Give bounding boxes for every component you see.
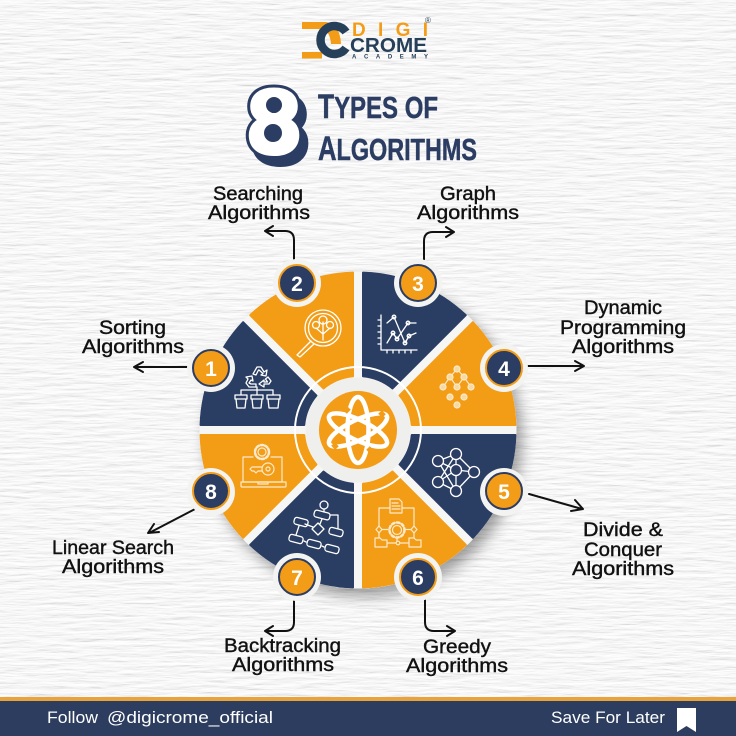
label: Linear Search Algorithms: Linear Search <box>52 538 174 559</box>
badge 5 <box>486 473 522 509</box>
label: Backtracking Algorithms: Algorithms <box>232 655 334 676</box>
badge 1 <box>193 350 229 386</box>
label: Divide and Conquer Algorithms: Conquer <box>584 540 663 561</box>
label: Searching Algorithms <box>208 184 310 224</box>
label: Sorting Algorithms <box>82 318 184 358</box>
title text <box>318 88 477 168</box>
icon: recycling and bins <box>235 367 280 408</box>
label: Sorting Algorithms: Sorting <box>99 318 166 339</box>
badge 2: 2 <box>291 273 303 296</box>
label: Graph Algorithms <box>417 184 519 224</box>
label: Linear Search Algorithms <box>52 538 174 578</box>
title numeral 8: 8 <box>249 72 299 171</box>
logo: Digicrome Academy: ACADEMY <box>352 54 428 60</box>
badge 3 <box>400 265 436 301</box>
label: Divide and Conquer Algorithms <box>572 520 674 580</box>
arrow 5 <box>529 494 583 511</box>
sector 5 navy <box>400 435 515 538</box>
label: Searching Algorithms: Searching <box>213 184 303 205</box>
title numeral 8: 8 <box>249 72 299 171</box>
label: Graph Algorithms: Algorithms <box>417 203 519 224</box>
label: Divide and Conquer Algorithms: Divide & <box>583 520 663 541</box>
label: Searching Algorithms: Algorithms <box>208 203 310 224</box>
badge 6 <box>400 559 436 595</box>
label: Linear Search Algorithms: Algorithms <box>62 557 164 578</box>
sector 7 navy <box>250 472 353 587</box>
badge 3: 3 <box>412 273 424 296</box>
center atom emblem <box>319 391 397 469</box>
footer follow text: Follow <box>47 708 99 727</box>
title text: TYPES OF <box>318 88 438 126</box>
label: Divide and Conquer Algorithms: Algorithms <box>572 559 674 580</box>
arrow 3 <box>424 227 454 262</box>
arrow 4 <box>528 361 584 371</box>
icon: magnifier with tree <box>297 310 341 357</box>
arrow 7 <box>265 600 294 636</box>
inner white ring <box>295 367 421 493</box>
label: Dynamic Programming Algorithms <box>560 298 686 358</box>
badge 5: 5 <box>498 481 510 504</box>
icon: line chart <box>378 315 417 353</box>
label: Graph Algorithms: Graph <box>440 184 496 205</box>
footer save text: Save For Later <box>551 708 665 727</box>
footer follow text <box>47 708 273 727</box>
sector 6 orange <box>311 463 466 618</box>
icon: neural network <box>432 448 480 496</box>
label: Backtracking Algorithms: Backtracking <box>224 636 341 657</box>
icon: node tree <box>440 366 474 408</box>
label: Dynamic Programming Algorithms: Programming <box>560 318 686 339</box>
logo: Digicrome Academy: ® <box>425 16 431 25</box>
logo: Digicrome Academy: DIGI <box>352 20 428 41</box>
icon: bookmark <box>677 708 696 732</box>
footer follow text: @digicrome_official <box>107 708 273 727</box>
sector 8 orange <box>170 383 325 538</box>
center paper disc <box>306 378 410 482</box>
label: Sorting Algorithms: Algorithms <box>82 337 184 358</box>
badge 7 <box>279 559 315 595</box>
badge 2 <box>279 265 315 301</box>
badge 8: 8 <box>205 481 217 504</box>
label: Greedy Algorithms: Greedy <box>423 637 492 658</box>
label: Dynamic Programming Algorithms: Dynamic <box>584 298 662 319</box>
logo: Digicrome Academy: CROME <box>350 35 427 57</box>
badge 7: 7 <box>291 567 303 590</box>
icon: document and process flow <box>375 499 421 547</box>
sector 3 navy <box>363 273 466 388</box>
icon: flowchart <box>288 501 344 554</box>
notch cut-outs <box>187 259 528 601</box>
label: Greedy Algorithms <box>406 637 508 677</box>
arrow 2 <box>265 226 294 262</box>
logo: Digicrome Academy <box>302 16 431 60</box>
label: Backtracking Algorithms <box>224 636 341 676</box>
title numeral 8: 8 <box>255 80 305 179</box>
arrow 6 <box>425 600 455 636</box>
title text: ALGORITHMS <box>318 130 477 168</box>
sector 4 orange <box>391 322 546 477</box>
badge 4 <box>486 350 522 386</box>
badge 1: 1 <box>205 358 217 381</box>
label: Greedy Algorithms: Algorithms <box>406 656 508 677</box>
footer bar <box>0 697 736 736</box>
badge 8 <box>193 473 229 509</box>
badge 6: 6 <box>412 567 424 590</box>
icon: laptop, key and gear <box>241 445 286 487</box>
arrow 8 <box>148 508 197 533</box>
badge 4: 4 <box>498 358 510 381</box>
arrow 1 <box>134 362 189 372</box>
sector 1 navy <box>201 322 316 425</box>
sector 2 orange <box>250 242 405 397</box>
circular wheel <box>170 242 546 618</box>
label: Dynamic Programming Algorithms: Algorithms <box>572 337 674 358</box>
